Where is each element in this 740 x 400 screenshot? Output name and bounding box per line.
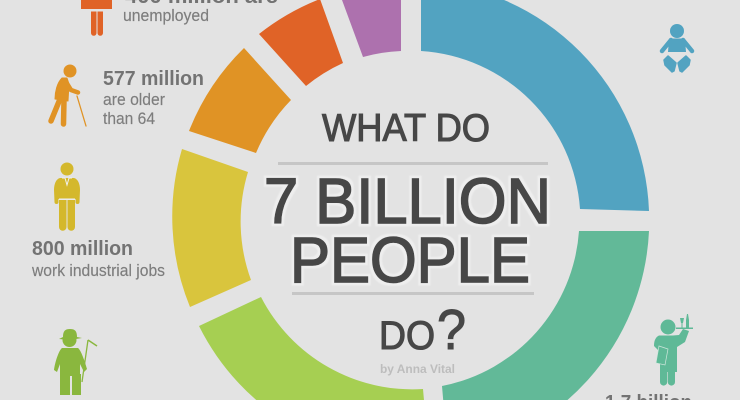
- text: 577 million: are older: [103, 91, 165, 109]
- icon: farmer with hoe: [54, 329, 97, 395]
- segment: red-orange: [259, 0, 343, 86]
- divider bottom: [292, 292, 534, 295]
- text: unemployed: unemployed: [123, 7, 209, 25]
- segment: lime: [199, 297, 429, 400]
- text: 800 million: [31, 238, 165, 280]
- segment: teal: [442, 231, 649, 400]
- title: [264, 107, 551, 376]
- segment: orange: [189, 48, 291, 153]
- icon: baby: [662, 24, 692, 72]
- text: 577 million: [103, 68, 204, 128]
- question mark: ?: [437, 298, 466, 362]
- text: 800 million: work industrial jobs: [31, 262, 165, 280]
- segment: yellow: [172, 149, 251, 307]
- icon: industrial worker: [54, 162, 80, 231]
- text: 800 million: 800 million: [32, 238, 133, 260]
- heading: what do: WHAT DO: [322, 107, 490, 150]
- divider top: [278, 162, 548, 165]
- segment: blue: [421, 0, 649, 211]
- heading: 7 billion: 7 BILLION: [264, 165, 551, 237]
- text: unemployed: [123, 0, 278, 25]
- segment: purple: [335, 0, 401, 57]
- icon: old man with cane: [51, 64, 86, 126]
- donut chart: [172, 0, 649, 400]
- heading: do: DO: [379, 314, 435, 358]
- text: 577 million: than 64: [103, 110, 155, 128]
- icon: waiter with tray: [654, 314, 693, 386]
- text: 577 million: 577 million: [103, 68, 204, 90]
- icon: unemployed person: [81, 0, 112, 36]
- byline: by Anna Vital: [380, 364, 455, 376]
- heading: people: PEOPLE: [290, 224, 530, 296]
